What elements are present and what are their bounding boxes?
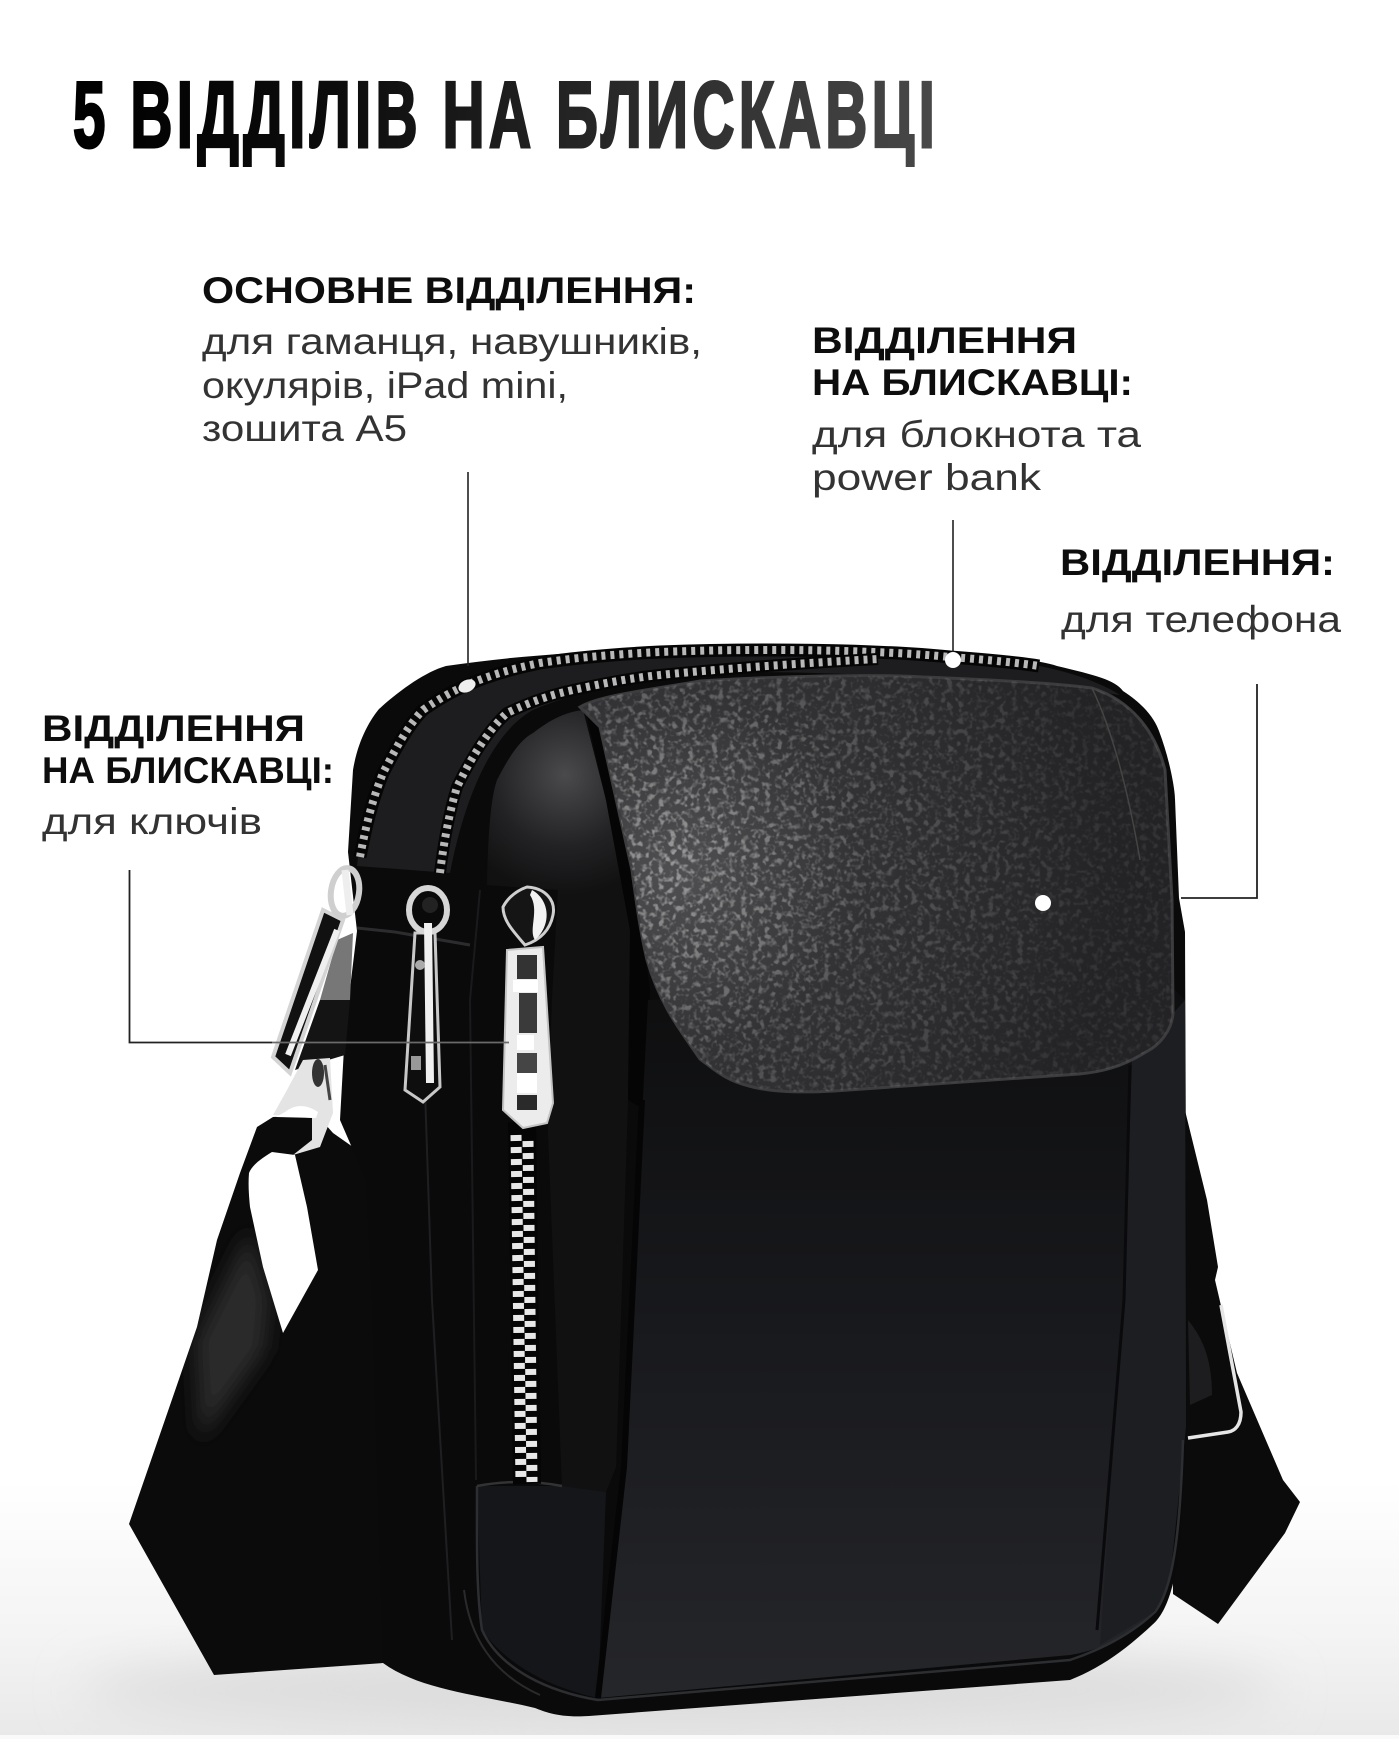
callout: zip compartment for notebook: для блокнота та <box>812 414 1141 455</box>
zipper puller right <box>503 887 553 1128</box>
strap opening <box>249 1152 318 1333</box>
leader line: main compartment <box>456 472 478 695</box>
callout: zip compartment for notebook: НА БЛИСКАВЦІ: <box>812 362 1133 403</box>
callout: zip compartment for notebook <box>812 320 1141 498</box>
callout: phone compartment <box>1060 542 1341 640</box>
lower side pocket <box>477 1486 606 1698</box>
side zipper <box>516 1122 532 1484</box>
bag photo illustration <box>129 646 1300 1716</box>
callout: keys compartment: ВІДДІЛЕННЯ <box>42 708 305 749</box>
strap highlight <box>195 1230 270 1440</box>
snap hook clip <box>273 1058 333 1155</box>
callout: main compartment <box>202 270 702 449</box>
right strap <box>1170 1090 1300 1624</box>
leader line: keys compartment <box>130 870 509 1042</box>
callout: zip compartment for notebook: ВІДДІЛЕННЯ <box>812 320 1077 361</box>
zipper puller middle <box>405 888 447 1102</box>
callout: main compartment: ОСНОВНЕ ВІДДІЛЕННЯ: <box>202 270 696 311</box>
left strap <box>129 1115 420 1675</box>
callout: main compartment: для гаманця, навушників, <box>202 321 702 362</box>
leader line: phone compartment <box>1035 684 1257 911</box>
title: 5 ВІДДІЛІВ НА БЛИСКАВЦІ <box>73 62 935 167</box>
callout: main compartment: окулярів, iPad mini, <box>202 365 568 406</box>
flap seam <box>1092 688 1140 860</box>
callout: keys compartment: для ключів <box>42 801 262 842</box>
callout: zip compartment for notebook: power bank <box>812 457 1042 498</box>
groove beside flap <box>585 708 650 1110</box>
callout: phone compartment: ВІДДІЛЕННЯ: <box>1060 542 1335 583</box>
bag seams <box>357 890 1183 1700</box>
leader line: zip compartment <box>945 520 961 668</box>
bag body <box>340 646 1187 1716</box>
callout: keys compartment <box>42 708 334 842</box>
top rim <box>357 650 1120 873</box>
callout: phone compartment: для телефона <box>1061 599 1341 640</box>
right strap buckle <box>1188 1305 1241 1438</box>
callout: main compartment: зошита А5 <box>202 408 407 449</box>
flap leather grain <box>570 670 1190 1100</box>
side leather panel <box>487 710 630 1492</box>
callout: keys compartment: НА БЛИСКАВЦІ: <box>42 750 334 791</box>
front panel <box>598 980 1186 1698</box>
zipper puller left <box>273 866 362 1073</box>
right front sub-panel <box>1100 1000 1186 1645</box>
top zippers <box>360 650 1039 873</box>
front flap <box>580 676 1173 1092</box>
